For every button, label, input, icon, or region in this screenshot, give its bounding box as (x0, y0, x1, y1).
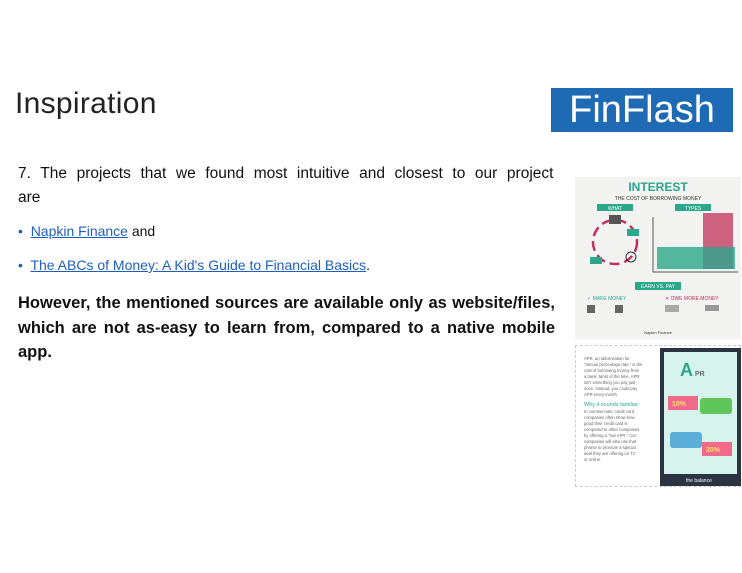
text: APR definition: compared to other companies (584, 427, 639, 432)
text block: intro: are (18, 189, 40, 206)
cycle diagram: WHAT (608, 206, 622, 212)
text: APR definition: In commercials, credit card (584, 409, 635, 414)
text: APR definition: companies will also use that (584, 439, 637, 444)
bullet: ABCs of Money: • The ABCs of Money: A Kid's Guide to Financial Basics. (18, 257, 370, 273)
text: APR definition: deal they are offering on TV (584, 451, 636, 456)
earn vs pay: ✓ MAKE MONEY (587, 296, 627, 302)
earn vs pay: EARN VS. PAY (641, 284, 676, 290)
heading: INTEREST: INTEREST (628, 180, 688, 194)
text: APR definition: by offering a "low APR." Car (584, 433, 637, 438)
panel: APR illustration: A (680, 360, 693, 380)
text: APR definition: companies often show how (584, 415, 635, 420)
text: APR definition: or online. (584, 457, 601, 462)
text block: conclusion (18, 294, 555, 361)
text: APR definition: APR, an abbreviation for (584, 356, 630, 361)
text block: conclusion: app. (18, 343, 52, 361)
text block: conclusion: However, the mentioned sources are available only as website/files, (18, 294, 555, 312)
text block: conclusion: which are not as-easy to learn from, compared to a native mobile (18, 318, 555, 336)
text: APR definition: good their credit card is (584, 421, 628, 426)
bar chart: types (653, 204, 738, 272)
logo: FinFlash: FinFlash (569, 89, 715, 131)
bullet: Napkin Finance: • Napkin Finance and (18, 223, 155, 239)
text block: intro (18, 165, 554, 206)
earn vs pay: Napkin Finance (644, 330, 673, 335)
title: Inspiration (15, 87, 157, 120)
heading: INTEREST (615, 180, 702, 202)
panel: APR illustration: PR (695, 371, 705, 378)
text: APR definition: Why it sounds familiar: (584, 402, 640, 408)
earn vs pay (587, 282, 719, 335)
panel: APR illustration: the balance (686, 478, 712, 484)
bar chart: types: TYPES (685, 206, 702, 212)
bullet list (18, 223, 370, 273)
text: APR definition: phrase to promote a special (584, 445, 636, 450)
panel: APR illustration: 10% (672, 401, 687, 408)
text: APR definition: a bank. Most of the time, APR (584, 374, 639, 379)
text: APR definition: isn't something you pay just (584, 380, 636, 385)
text: APR definition: "annual percentage rate," is the (584, 362, 643, 367)
panel: APR illustration: 20% (706, 447, 721, 454)
image: APR the balance (575, 345, 741, 487)
text: APR definition (584, 356, 643, 462)
cycle diagram (590, 204, 639, 264)
earn vs pay: ✕ OWE MORE MONEY (665, 296, 719, 302)
text: APR definition: once. Instead, you could pay (584, 386, 638, 391)
text: APR definition: APR every month. (584, 392, 618, 397)
image: napkin finance interest (575, 177, 741, 339)
text: APR definition: cost of borrowing money from (584, 368, 640, 373)
panel: APR illustration (660, 348, 741, 486)
heading: INTEREST: THE COST OF BORROWING MONEY (615, 196, 702, 202)
text block: intro: 7. The projects that we found most intuitive and closest to our project (18, 165, 553, 182)
